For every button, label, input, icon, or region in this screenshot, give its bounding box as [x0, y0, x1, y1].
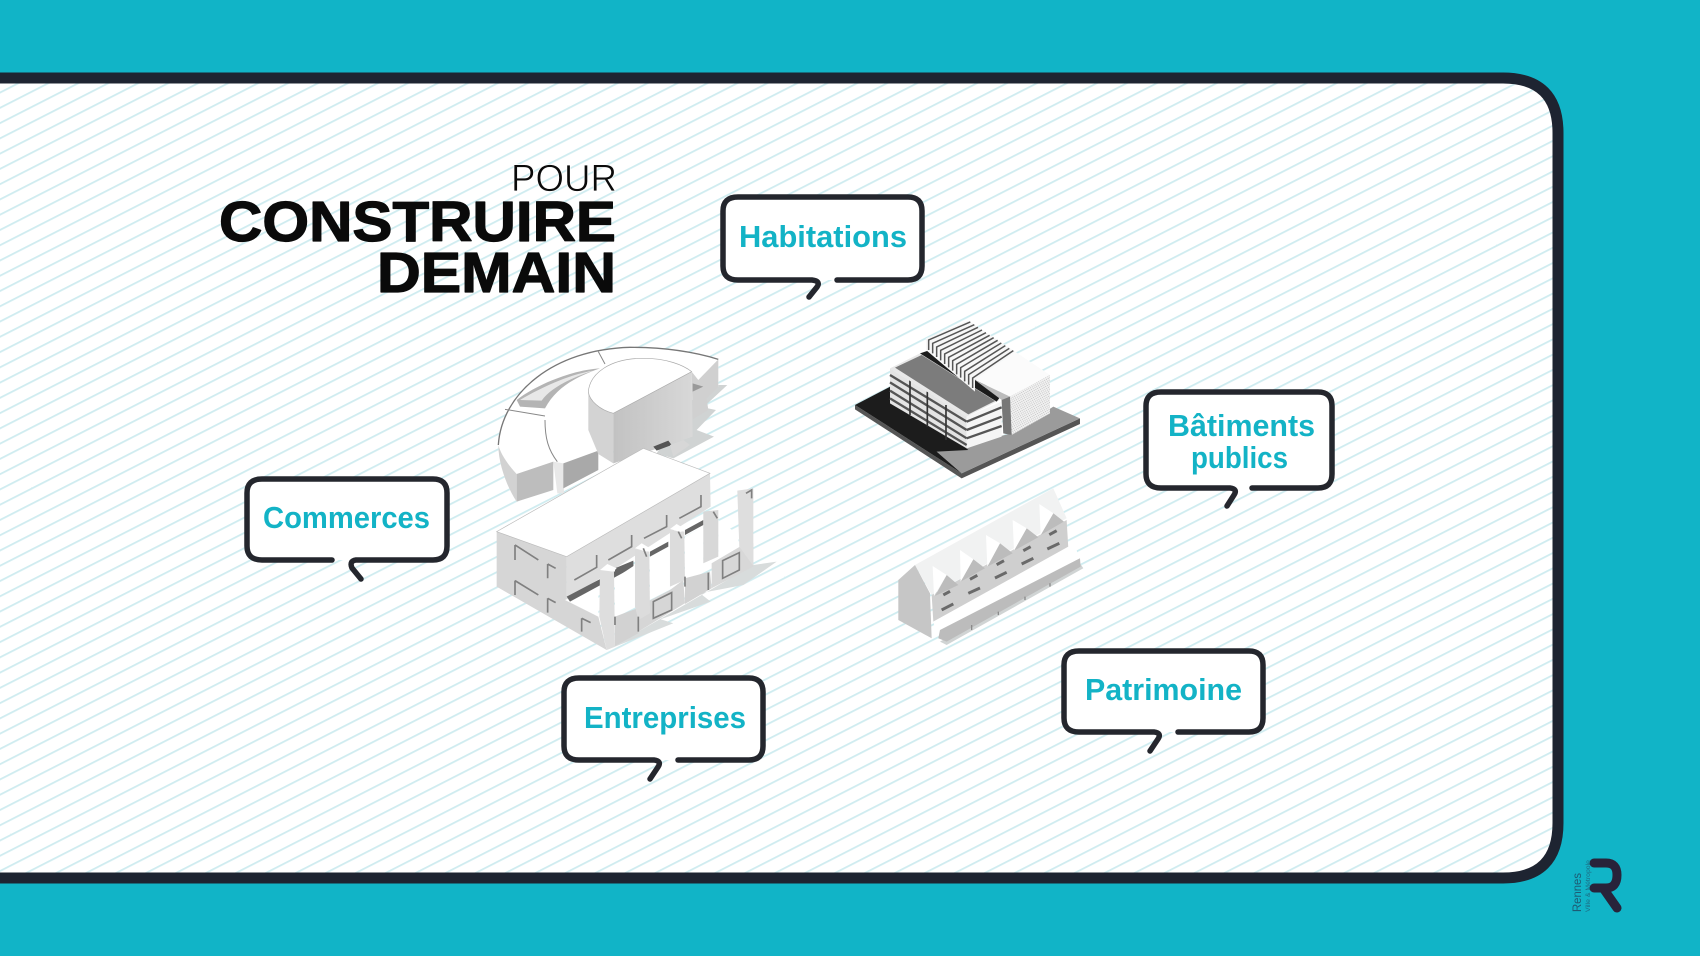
- building: heritage row houses: [898, 488, 1083, 645]
- title: pour construire demain: [219, 158, 617, 305]
- callout: Bâtiments publics: Bâtiments: [1168, 408, 1315, 443]
- callout: Commerces: Commerces: [263, 500, 430, 535]
- callout: Bâtiments publics: [1146, 392, 1332, 506]
- callout: Bâtiments publics: publics: [1191, 440, 1288, 475]
- panel: striped framed panel: [0, 78, 1558, 878]
- title: pour construire demain: DEMAIN: [377, 241, 616, 305]
- callout: Patrimoine: Patrimoine: [1085, 672, 1242, 707]
- building: curved public building: [498, 347, 727, 502]
- logo: Rennes Ville & Métropole: [1572, 860, 1617, 912]
- logo: Rennes Ville & Métropole: Ville & Métropole: [1585, 860, 1592, 912]
- building: housing block with parking base: [855, 321, 1080, 478]
- callout: Habitations: Habitations: [739, 219, 907, 254]
- callout: Habitations: [723, 197, 922, 297]
- callout: Entreprises: [564, 678, 763, 779]
- callout: Patrimoine: [1064, 651, 1263, 751]
- title: pour construire demain: POUR: [511, 158, 617, 200]
- title: pour construire demain: CONSTRUIRE: [219, 190, 616, 254]
- callout: Entreprises: Entreprises: [584, 700, 746, 735]
- callout: Commerces: [247, 479, 447, 579]
- logo: Rennes Ville & Métropole: Rennes: [1572, 873, 1584, 912]
- building: commercial block with columns: [497, 448, 777, 650]
